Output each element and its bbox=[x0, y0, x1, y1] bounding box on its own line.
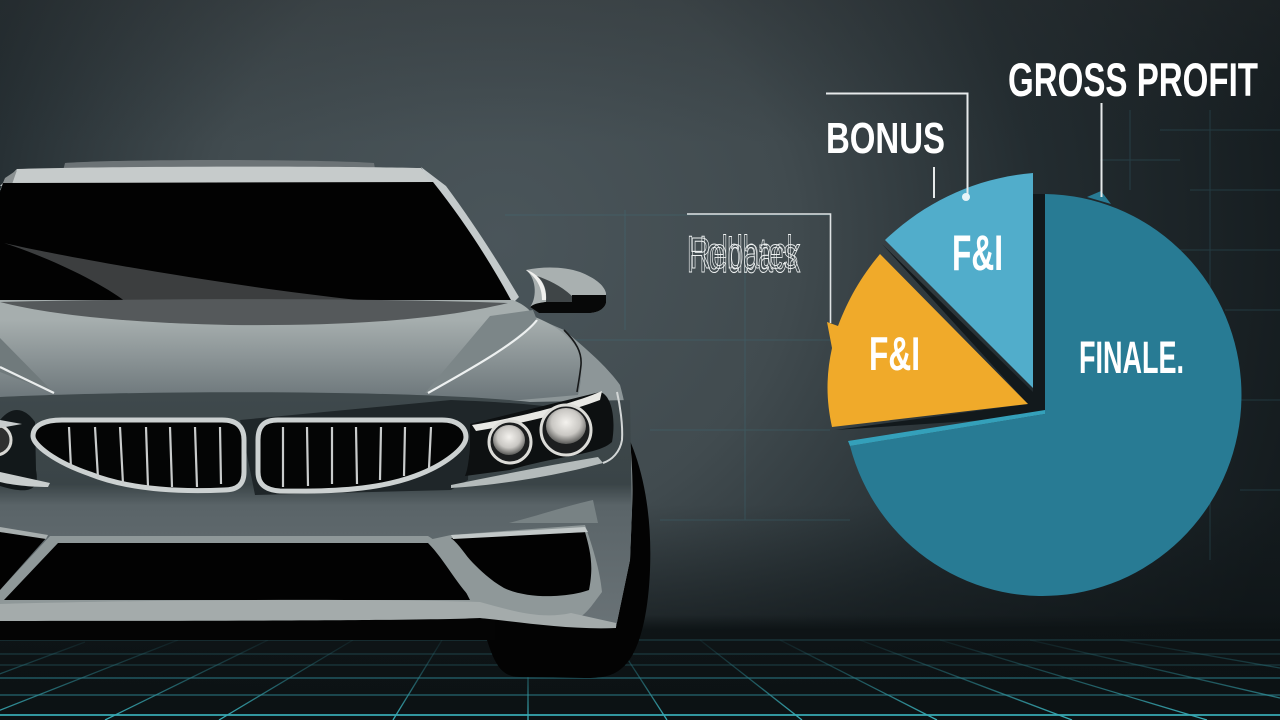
pie slice: F&I orange bbox=[827, 254, 1028, 427]
cowl bbox=[0, 299, 508, 325]
callout: scribbled label: Rebates bbox=[690, 229, 798, 278]
pillar bbox=[421, 167, 519, 304]
hood and body bbox=[0, 300, 581, 400]
pie gap shadow bbox=[835, 194, 1045, 430]
label: F&I orange: F&I bbox=[869, 327, 920, 380]
callout: bonus: BONUS bbox=[826, 114, 945, 163]
windshield bbox=[0, 182, 512, 303]
fender bbox=[480, 317, 632, 627]
car bbox=[0, 160, 650, 678]
headlight left partial bbox=[0, 420, 50, 487]
underbody bbox=[0, 600, 495, 640]
body right highlight bbox=[509, 500, 598, 523]
nose panel bbox=[0, 392, 632, 627]
floor grid bbox=[0, 615, 1280, 720]
callout: scribbled label: Holdback bbox=[687, 226, 801, 284]
label: profit: FINALE. bbox=[1079, 332, 1184, 383]
pie slice: F&I blue bbox=[885, 173, 1033, 388]
right grille bbox=[258, 420, 466, 491]
roof strip bbox=[62, 160, 376, 175]
left grille bbox=[33, 420, 244, 491]
lower intake bbox=[0, 525, 616, 628]
callout: bonus bbox=[826, 94, 970, 201]
windshield reflection bbox=[4, 243, 358, 302]
mirror bbox=[526, 268, 606, 313]
pie chart bbox=[827, 173, 1241, 596]
pie slice: profit bbox=[848, 191, 1241, 596]
label: F&I blue: F&I bbox=[952, 225, 1003, 281]
hood creases bbox=[0, 310, 581, 393]
callout: scribbled label bbox=[687, 214, 830, 323]
headlight right bbox=[451, 391, 622, 488]
roof bbox=[0, 167, 438, 186]
tire bbox=[470, 430, 650, 678]
